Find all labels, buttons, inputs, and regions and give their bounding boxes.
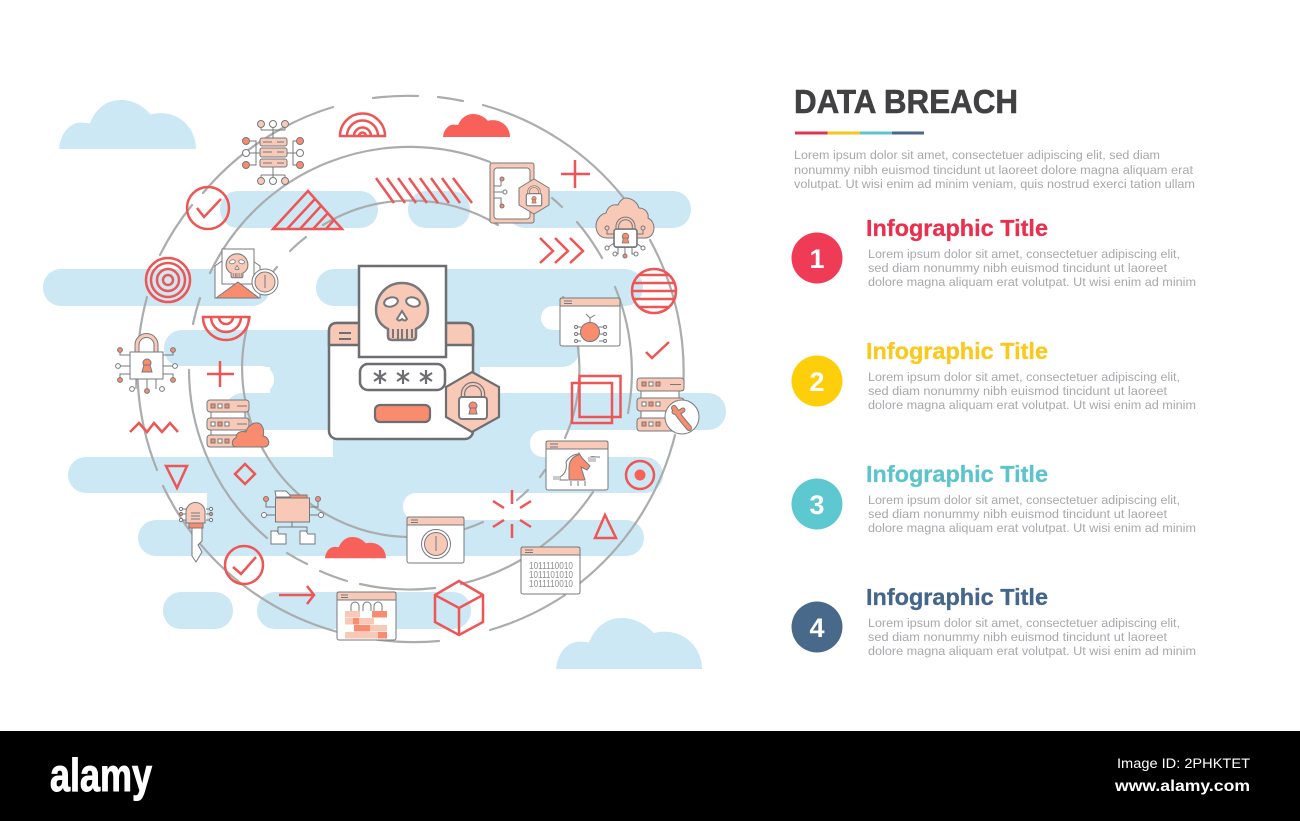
item 3 text: Lorem ipsum dolor sit amet, consectetuer adipiscing elit, <box>868 493 1180 507</box>
binary digits: 1011110010 <box>529 560 573 572</box>
footer url: www.alamy.com <box>1114 778 1250 795</box>
item 2 text <box>868 370 1196 412</box>
icon: envelope with skull <box>215 249 278 298</box>
icon: check circle bottom <box>225 546 263 584</box>
icon: trojan horse window <box>546 441 608 490</box>
hexagon padlock <box>446 372 499 432</box>
icon: server with wrench <box>637 378 699 434</box>
skull <box>376 283 428 340</box>
badge 3: 3 <box>809 490 825 520</box>
window header <box>329 323 473 345</box>
icon: check circle <box>187 187 229 229</box>
icon: server with cloud <box>207 400 269 447</box>
item 4 title: Infographic Title <box>866 584 1048 610</box>
item 1 text: Lorem ipsum dolor sit amet, consectetuer adipiscing elit, <box>868 247 1180 261</box>
item 3 title: Infographic Title <box>866 461 1048 487</box>
icon: plus top right <box>561 160 590 188</box>
footer bar <box>0 731 1300 821</box>
item 4 text <box>868 616 1196 658</box>
icon: binary window <box>521 547 580 594</box>
badge 2 <box>792 356 842 406</box>
item 3 text <box>868 493 1196 535</box>
badge 1: 1 <box>809 244 825 274</box>
item 3 text: sed diam nonummy nibh euismod tincidunt ut laoreet <box>868 507 1168 521</box>
badge 2: 2 <box>809 367 825 397</box>
heading underline <box>795 132 924 134</box>
icon: alert window <box>407 517 464 563</box>
icon: red cloud top <box>443 114 510 137</box>
icon: plus left <box>207 361 234 387</box>
item 4 text: dolore magna aliquam erat volutpat. Ut wisi enim ad minim <box>868 644 1196 658</box>
icon: bug window <box>560 298 620 346</box>
password field <box>360 364 445 390</box>
item 2 text: dolore magna aliquam erat volutpat. Ut wisi enim ad minim <box>868 398 1196 412</box>
icon: half rainbow top <box>340 114 385 136</box>
central icon: password window with skull document and padlock <box>329 266 499 439</box>
icon: striped triangle <box>273 191 342 229</box>
icon: half rainbow bottom <box>203 317 249 340</box>
icon: binary window: 1011101010 <box>529 569 573 581</box>
icon: double squares <box>572 376 620 423</box>
icon: cloud padlock <box>596 198 654 258</box>
icon: circle dot <box>626 461 654 489</box>
item 1 <box>792 215 1196 289</box>
icon: arrow <box>279 586 314 604</box>
item 2 text: Lorem ipsum dolor sit amet, consectetuer adipiscing elit, <box>868 370 1180 384</box>
item 4 <box>792 584 1196 658</box>
intro paragraph <box>794 148 1195 191</box>
icon: key <box>179 502 213 562</box>
outer ring <box>137 96 684 642</box>
icon: chevrons <box>540 238 583 263</box>
icon: phone with padlock <box>490 163 549 223</box>
badge 3 <box>792 478 842 530</box>
cloud: top left <box>59 100 196 149</box>
item 3 <box>792 461 1196 535</box>
item 1 title: Infographic Title <box>866 215 1048 241</box>
intro paragraph: nonummy nibh euismod tincidunt ut laoreet dolore magna aliquam erat <box>794 163 1194 177</box>
item 1 text <box>868 247 1196 289</box>
item 2 title: Infographic Title <box>866 338 1048 364</box>
inner ring <box>242 201 579 537</box>
footer logo: alamy <box>50 749 152 801</box>
icon: striped circle <box>632 269 676 313</box>
icon: burst <box>493 490 531 538</box>
asterisks <box>374 370 432 384</box>
item 2 text: sed diam nonummy nibh euismod tincidunt ut laoreet <box>868 384 1168 398</box>
item 2 <box>792 338 1196 412</box>
icon: red cloud bottom <box>325 537 386 558</box>
item 4 text: sed diam nonummy nibh euismod tincidunt ut laoreet <box>868 630 1168 644</box>
icon: circuit padlock <box>116 336 177 393</box>
icon: inverted triangle <box>166 466 187 488</box>
intro paragraph: volutpat. Ut wisi enim ad minim veniam, quis nostrud exerci tation ullam <box>794 177 1195 191</box>
icon: firewall window <box>337 592 396 640</box>
window <box>329 323 473 439</box>
item 1 text: dolore magna aliquam erat volutpat. Ut wisi enim ad minim <box>868 275 1196 289</box>
badge 4 <box>792 602 842 652</box>
intro paragraph: Lorem ipsum dolor sit amet, consectetuer adipiscing elit, sed diam <box>794 148 1160 162</box>
middle ring <box>189 147 632 590</box>
badge 1 <box>792 232 842 284</box>
icon: server network <box>242 120 304 184</box>
icon: binary window: 1011110010 <box>529 578 573 590</box>
icon: folder network <box>262 491 324 544</box>
icon: small check <box>646 342 669 358</box>
icon: diagonal hatch lines <box>376 178 472 203</box>
background pills and clouds <box>43 100 726 669</box>
icon: diamond <box>235 464 255 484</box>
item 3 text: dolore magna aliquam erat volutpat. Ut wisi enim ad minim <box>868 521 1196 535</box>
icon: cube <box>435 581 483 635</box>
badge 4: 4 <box>809 613 825 643</box>
image id: Image ID: 2PHKTET <box>1117 755 1250 771</box>
icon: triangle <box>595 515 616 538</box>
icon: zigzag <box>130 423 178 432</box>
button <box>375 405 430 422</box>
icon: target <box>146 258 190 302</box>
heading: DATA BREACH <box>794 84 1018 121</box>
alert badge <box>252 269 278 295</box>
cloud: bottom right <box>556 618 702 669</box>
item 1 text: sed diam nonummy nibh euismod tincidunt ut laoreet <box>868 261 1168 275</box>
skull document <box>359 266 446 357</box>
item 4 text: Lorem ipsum dolor sit amet, consectetuer adipiscing elit, <box>868 616 1180 630</box>
